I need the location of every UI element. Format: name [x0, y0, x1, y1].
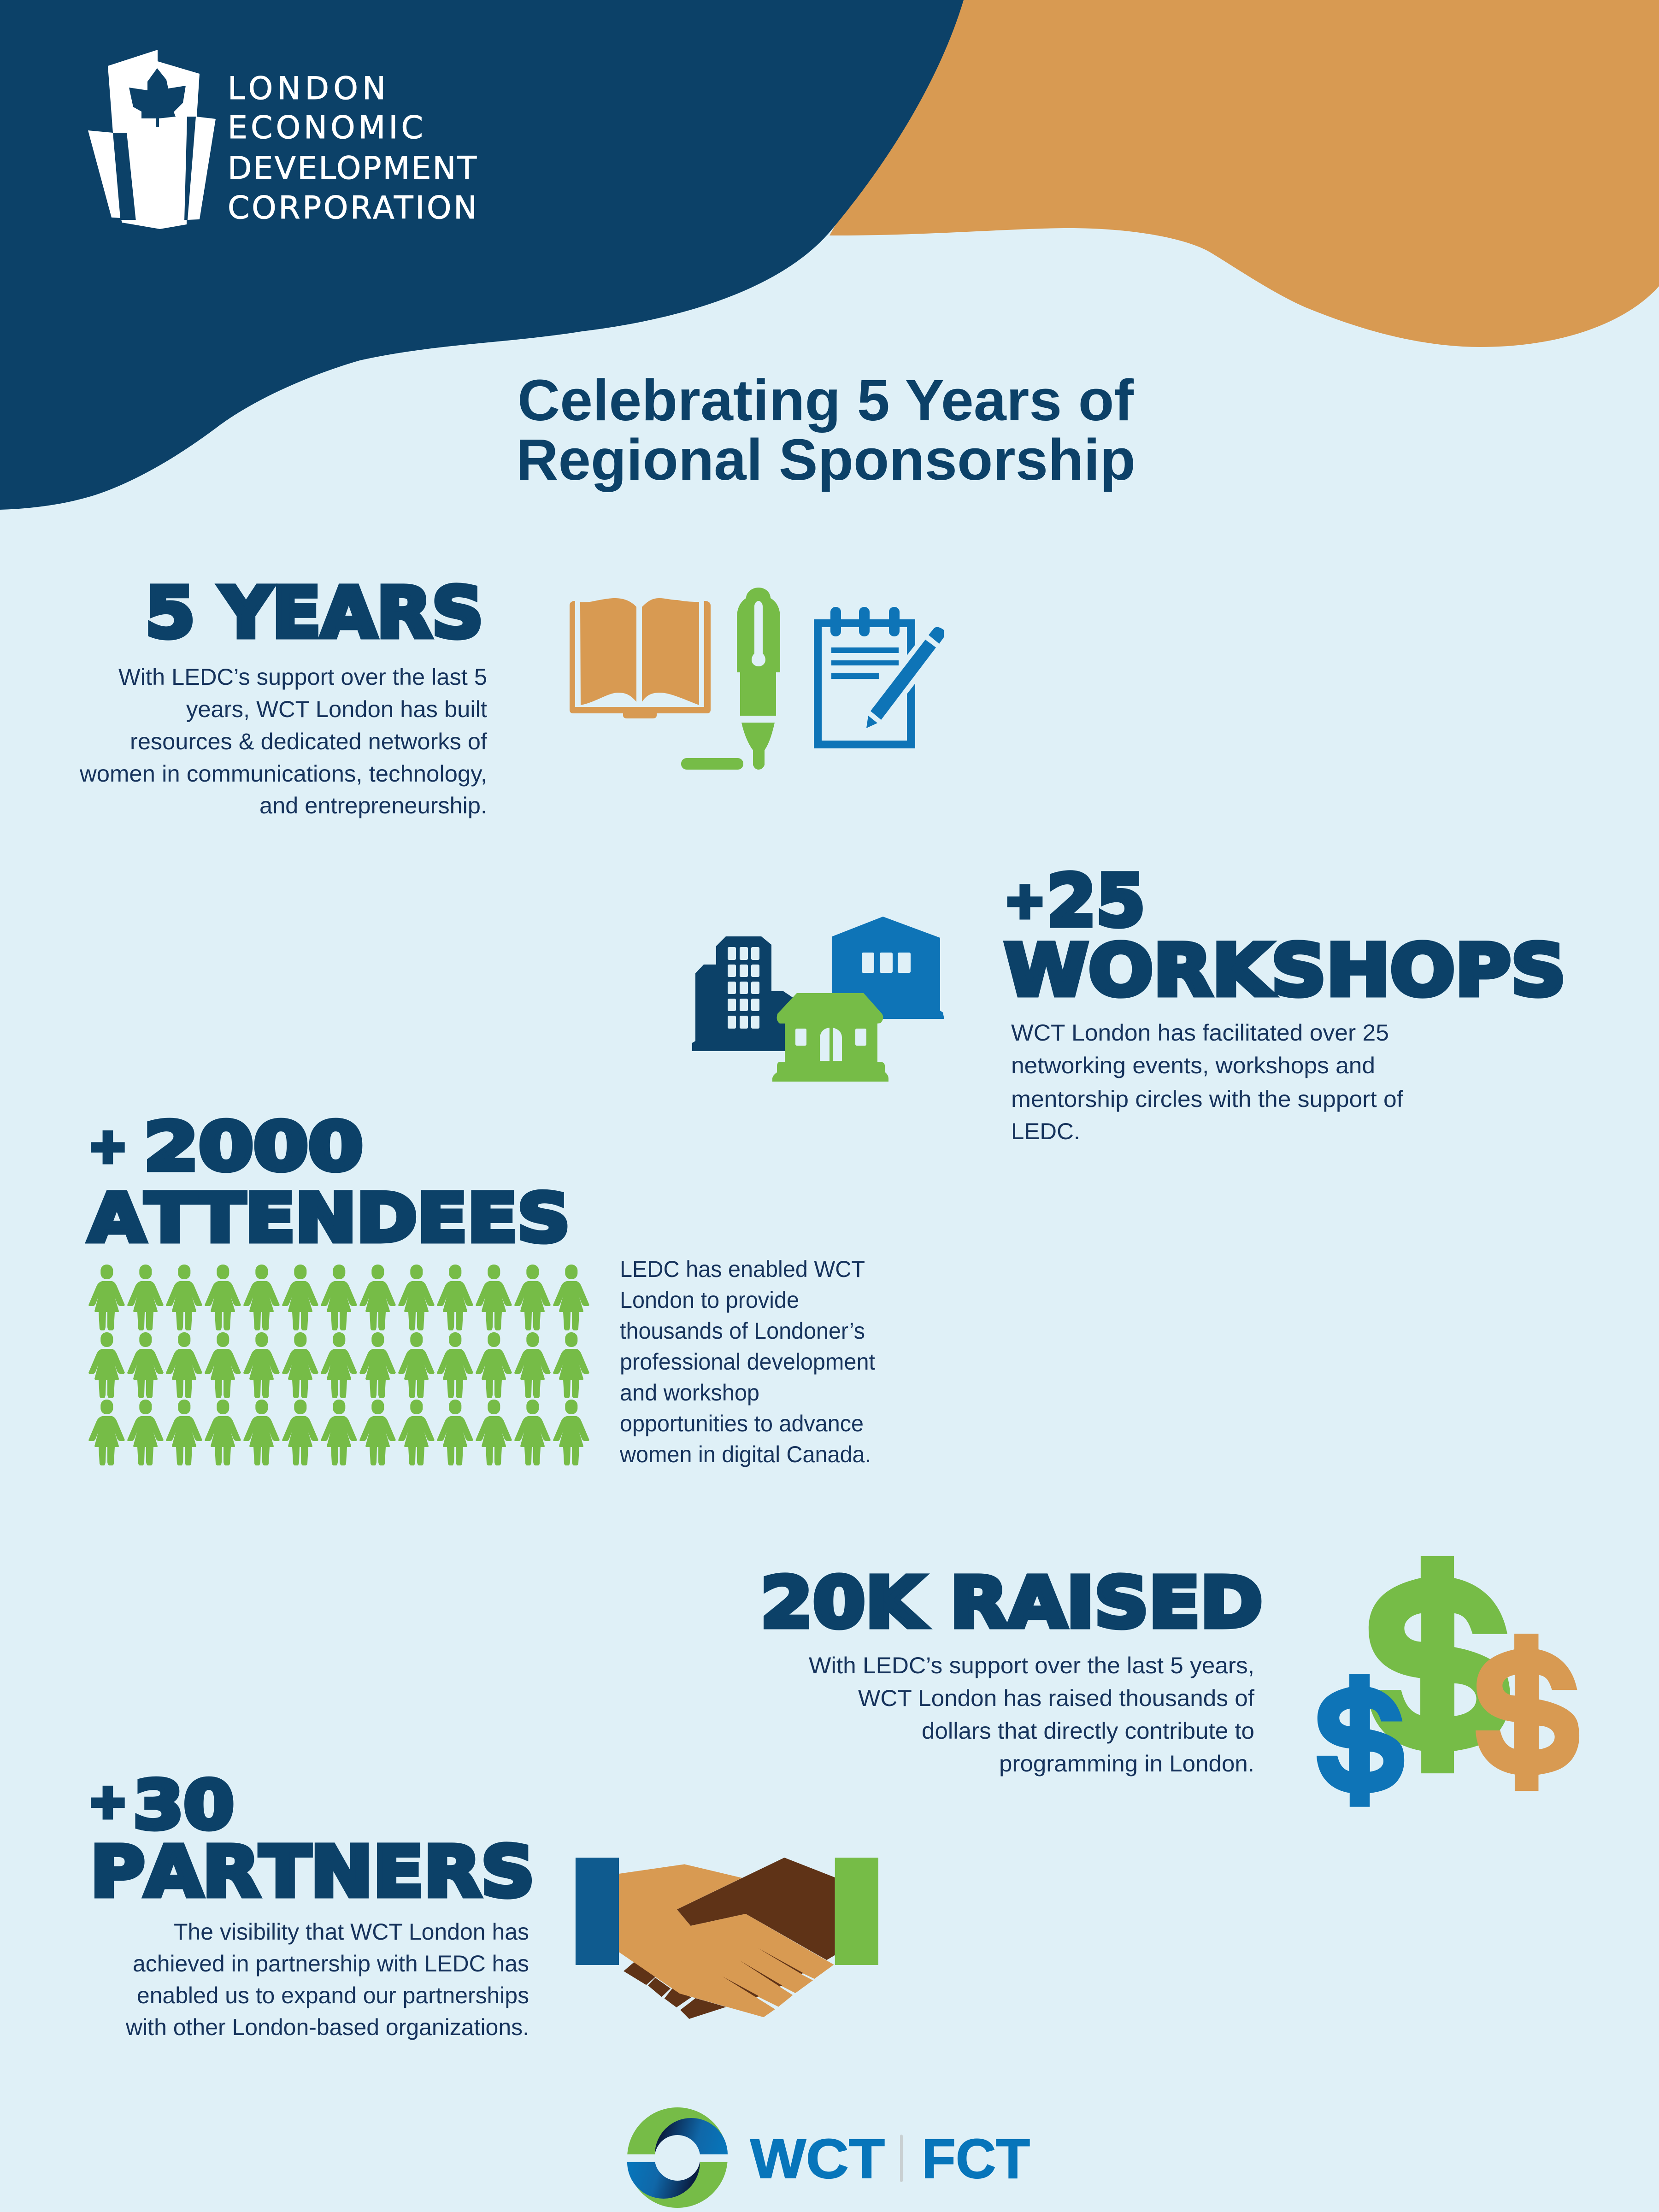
wordmark: FCT [922, 2127, 1030, 2190]
title: Regional Sponsorship [516, 427, 1135, 492]
heading: +2000 attendees: 2000 [144, 1108, 363, 1185]
pictogram: rows of women [88, 1265, 589, 1465]
heading: +2000 attendees [88, 1108, 570, 1257]
section: 5 years [79, 572, 944, 818]
icon: buildings [692, 917, 944, 1082]
logo wordmark: CORPORATION [228, 190, 477, 226]
LEDC logo [88, 50, 477, 229]
logo wordmark: ECONOMIC [228, 110, 423, 146]
icon: dollar signs [1317, 1556, 1579, 1807]
text block: 5 years: and entrepreneurship. [259, 793, 487, 818]
title: Celebrating 5 Years of [518, 368, 1134, 433]
text block: 20k raised: programming in London. [999, 1751, 1254, 1777]
logo wordmark: DEVELOPMENT [228, 150, 477, 187]
text block: workshops [1011, 1020, 1403, 1144]
text block: 20k raised: With LEDC’s support over the last 5 years, [809, 1653, 1254, 1678]
text block: attendees [619, 1256, 875, 1467]
text block: workshops: mentorship circles with the support of [1011, 1086, 1403, 1112]
text block: workshops: LEDC. [1011, 1118, 1080, 1144]
logo wordmark [228, 71, 477, 226]
text block: 5 years: With LEDC’s support over the last 5 [118, 664, 487, 690]
text block: attendees: London to provide [620, 1287, 799, 1313]
blue warehouse [832, 917, 944, 1019]
text block: attendees: thousands of Londoner’s [620, 1318, 865, 1344]
icon: notepad and pencil [814, 607, 944, 748]
section: attendees [88, 1108, 875, 1467]
navy tower [692, 936, 797, 1051]
section: 20k raised [760, 1556, 1579, 1807]
text block: workshops: WCT London has facilitated over 25 [1011, 1020, 1389, 1046]
heading: +25 workshops [1004, 860, 1566, 1012]
heading: +30 partners: 30 [133, 1766, 234, 1844]
text block: partners: achieved in partnership with LEDC has [133, 1951, 529, 1977]
text block: attendees: women in digital Canada. [619, 1441, 871, 1467]
heading: +25 workshops: + [1005, 872, 1045, 929]
WCT FCT logo [622, 2107, 1030, 2208]
heading: +30 partners: PARTNERS [90, 1831, 535, 1912]
icon: tower with maple leaf [88, 50, 216, 229]
text block: partners [125, 1919, 529, 2040]
heading: +30 partners [88, 1766, 535, 1912]
heading: +2000 attendees: ATTENDEES [88, 1179, 570, 1257]
icon: pen [681, 588, 780, 770]
wordmark: WCT [750, 2127, 885, 2190]
text block: attendees: LEDC has enabled WCT [620, 1256, 865, 1282]
text block: partners: enabled us to expand our partnerships [137, 1983, 529, 2008]
text block: attendees: opportunities to advance [620, 1411, 864, 1436]
heading: 20k raised: 20K RAISED [760, 1562, 1263, 1643]
text block: 5 years [79, 664, 487, 818]
heading: +25 workshops: WORKSHOPS [1004, 930, 1566, 1012]
section: partners [88, 1766, 878, 2040]
green house [772, 993, 888, 1082]
logo wordmark: LONDON [228, 71, 386, 107]
icon: ring mark [622, 2107, 733, 2208]
text block: 5 years: years, WCT London has built [186, 696, 487, 722]
navy header wave [0, 0, 964, 510]
text block: attendees: professional development [620, 1349, 875, 1375]
heading: 5 years: 5 YEARS [145, 572, 483, 653]
heading: +30 partners: + [88, 1774, 127, 1828]
orange header wave [830, 0, 1659, 347]
icon: open book [570, 598, 711, 718]
section: workshops [692, 860, 1566, 1144]
text block: 20k raised: WCT London has raised thousands of [858, 1685, 1254, 1711]
text block: 20k raised: dollars that directly contribute to [922, 1718, 1254, 1744]
title [516, 368, 1135, 492]
wordmark [750, 2127, 1030, 2190]
text block: workshops: networking events, workshops and [1011, 1053, 1375, 1078]
text block: attendees: and workshop [620, 1380, 759, 1406]
heading: +25 workshops: 25 [1047, 860, 1145, 942]
text block: 5 years: women in communications, technology, [79, 761, 487, 787]
icon: handshake [576, 1858, 878, 2019]
text block: 20k raised [809, 1653, 1254, 1777]
text block: partners: with other London-based organizations. [125, 2014, 529, 2040]
heading: +2000 attendees: + [88, 1119, 127, 1173]
text block: partners: The visibility that WCT London has [174, 1919, 529, 1945]
text block: 5 years: resources & dedicated networks of [130, 729, 487, 754]
